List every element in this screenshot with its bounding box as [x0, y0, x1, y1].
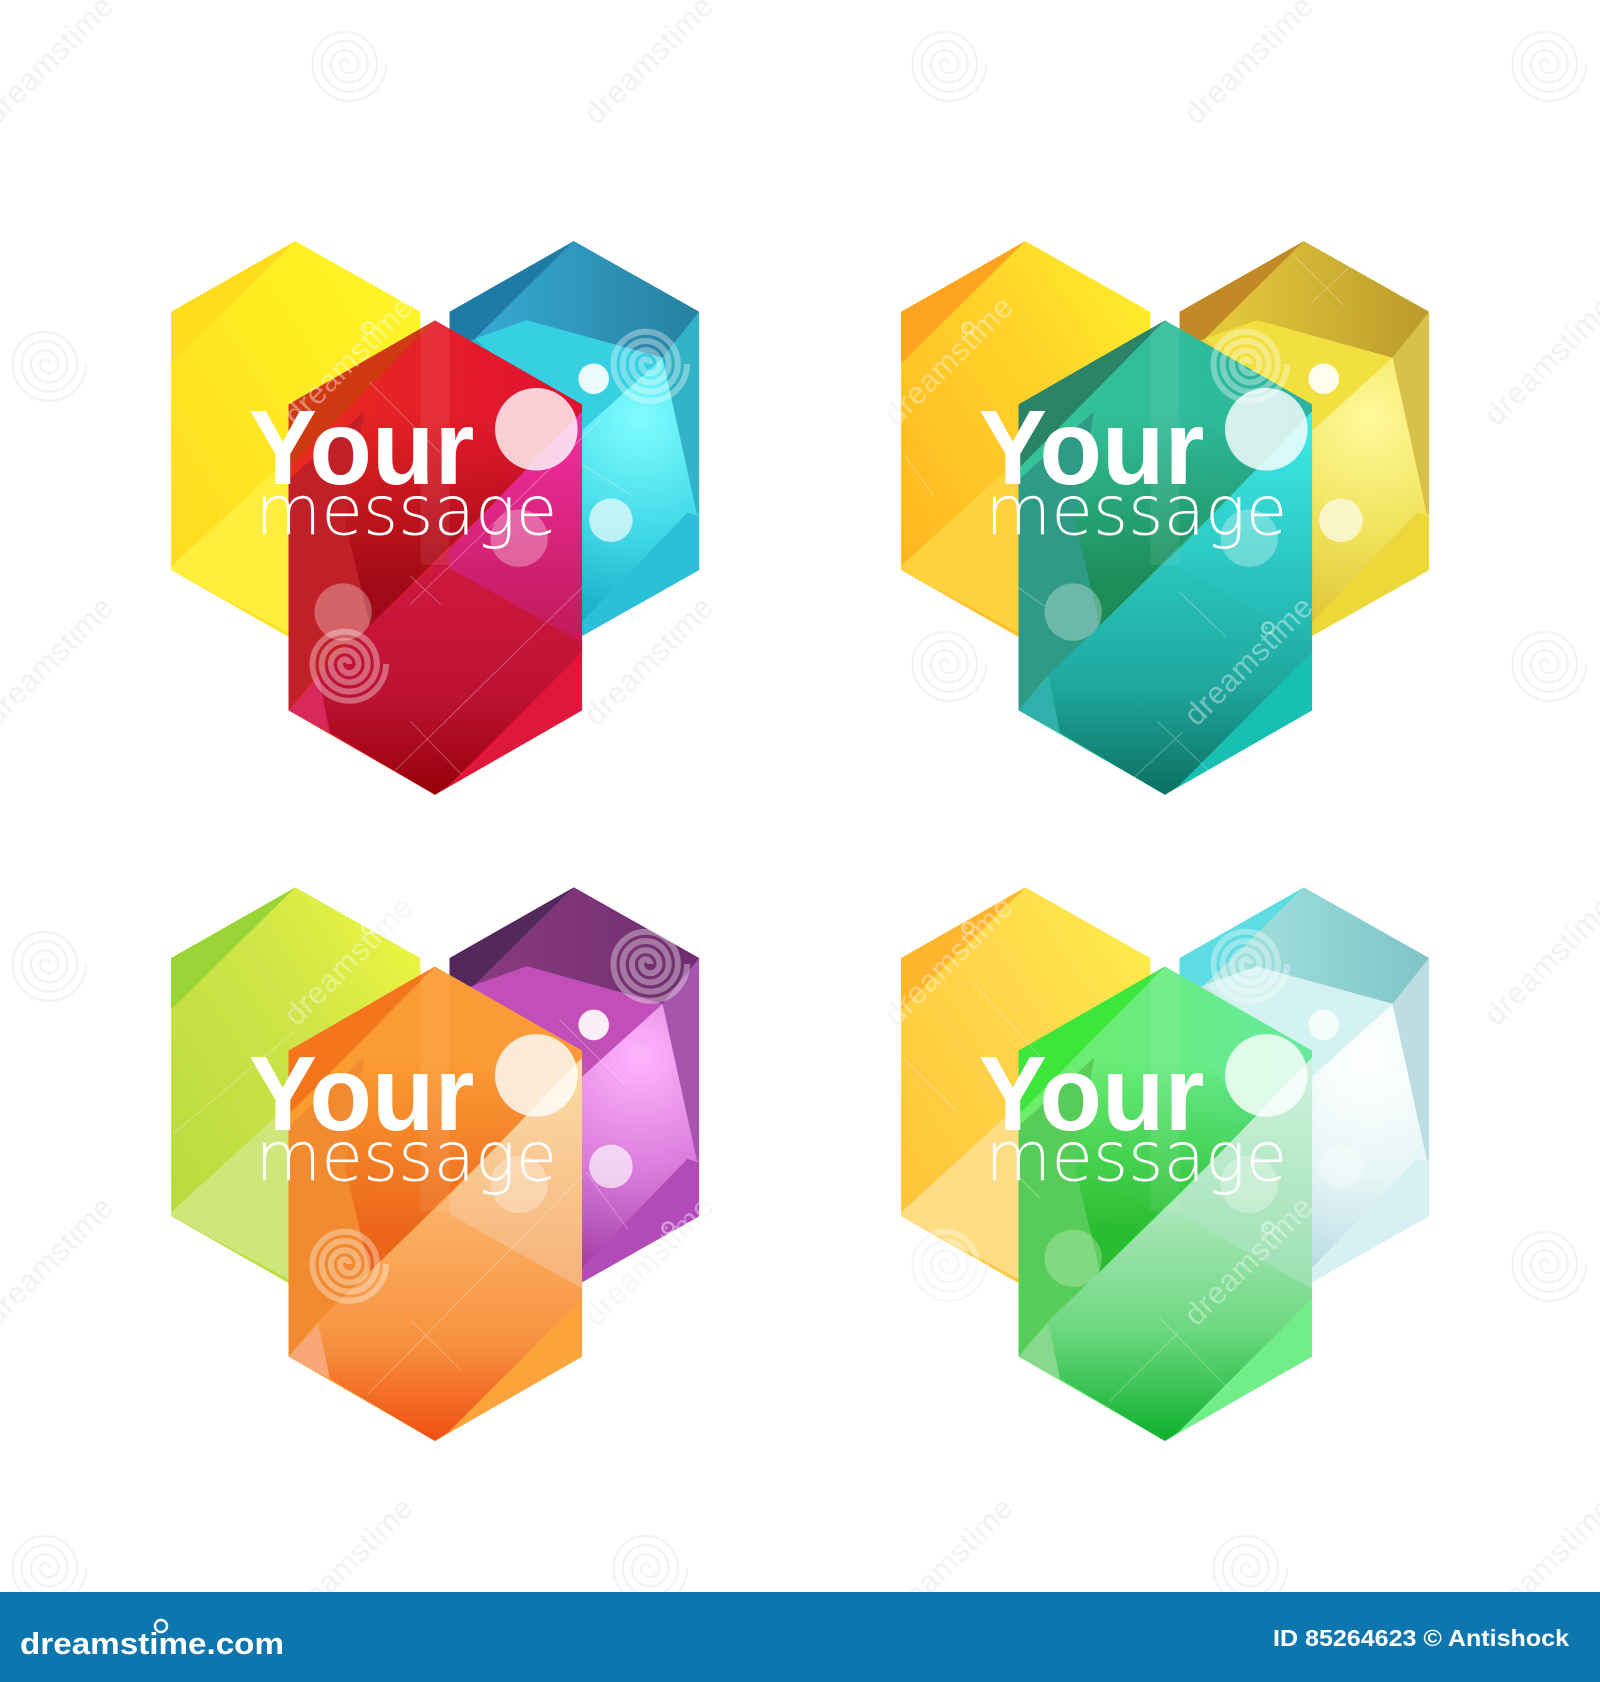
- panel: green, amber and pale blue hexagons: [901, 887, 1429, 1441]
- green front hexagon: [1018, 966, 1312, 1441]
- red front hexagon: [288, 320, 582, 795]
- watermark: dreamstime text over hexagons: dreamstime: [577, 1189, 720, 1332]
- subheading: message: message: [255, 1118, 557, 1198]
- heading: Your: Your: [249, 1035, 474, 1153]
- footer logo spiral: [155, 1620, 167, 1632]
- watermark: spirals over hexagons: [312, 332, 1287, 1301]
- watermark: dreamstime text on white: dreamstime: [877, 1490, 1020, 1633]
- panel: red, yellow and blue hexagons: [171, 241, 699, 795]
- watermark: dreamstime text over hexagons: dreamstime: [877, 289, 1020, 432]
- circles: [1044, 1010, 1363, 1287]
- footer bar: [0, 1592, 1600, 1682]
- footer image id and credit: ID 85264623 © Antishock: [1273, 1625, 1569, 1651]
- orange hexagon: [901, 241, 1150, 641]
- subheading: message: message: [985, 1118, 1287, 1198]
- gold hexagon: [1179, 241, 1429, 641]
- pale blue hexagon: [1179, 887, 1429, 1287]
- watermark: dreamstime text on white: dreamstime: [877, 289, 1020, 432]
- watermark: dreamstime text on white: dreamstime: [277, 889, 420, 1032]
- orange front hexagon: [288, 966, 582, 1441]
- subheading: message: message: [985, 471, 1287, 551]
- watermark: dreamstime text on white: dreamstime: [877, 889, 1020, 1032]
- subheading: message: message: [255, 471, 557, 551]
- watermark: dreamstime text on white: dreamstime: [277, 289, 420, 432]
- panel: orange, lime and purple hexagons: [171, 887, 699, 1441]
- watermark: dreamstime text on white: dreamstime: [277, 1490, 420, 1633]
- watermark: dreamstime text over hexagons: [277, 289, 1320, 1332]
- watermark: dreamstime text over hexagons: dreamstime: [877, 889, 1020, 1032]
- teal front hexagon: [1018, 320, 1312, 795]
- crosshair lines: [370, 383, 632, 775]
- blue hexagon: [449, 241, 699, 641]
- watermark: dreamstime text on white: dreamstime: [1177, 589, 1320, 732]
- watermark: dreamstime text on white: dreamstime: [577, 1189, 720, 1332]
- watermark: dreamstime text over hexagons: dreamstime: [277, 289, 420, 432]
- circles: [314, 363, 633, 641]
- purple hexagon: [449, 887, 699, 1287]
- watermark: dreamstime text on white: dreamstime: [1177, 1189, 1320, 1332]
- crosshair lines: [903, 981, 1230, 1402]
- amber hexagon: [901, 887, 1150, 1287]
- yellow hexagon: [171, 241, 420, 641]
- watermark: copyright rings over hexagons: [362, 322, 1274, 1234]
- watermark: dreamstime text over hexagons: dreamstime: [1177, 1189, 1320, 1332]
- panel: teal, orange and gold hexagons: [901, 241, 1429, 795]
- crosshair lines: [903, 254, 1354, 786]
- watermark: dreamstime text over hexagons: dreamstime: [1177, 589, 1320, 732]
- heading: Your: Your: [979, 389, 1204, 507]
- crosshair lines: [173, 1019, 628, 1394]
- footer logo: dreamstime.com: dreamstime.com: [20, 1626, 284, 1661]
- circles: [490, 1010, 633, 1213]
- circles: [1044, 363, 1363, 641]
- heading: Your: Your: [249, 389, 474, 507]
- watermark: dreamstime text over hexagons: dreamstime: [277, 889, 420, 1032]
- heading: Your: Your: [979, 1035, 1204, 1153]
- lime hexagon: [171, 887, 420, 1287]
- watermark: dreamstime text on white: dreamstime: [577, 589, 720, 732]
